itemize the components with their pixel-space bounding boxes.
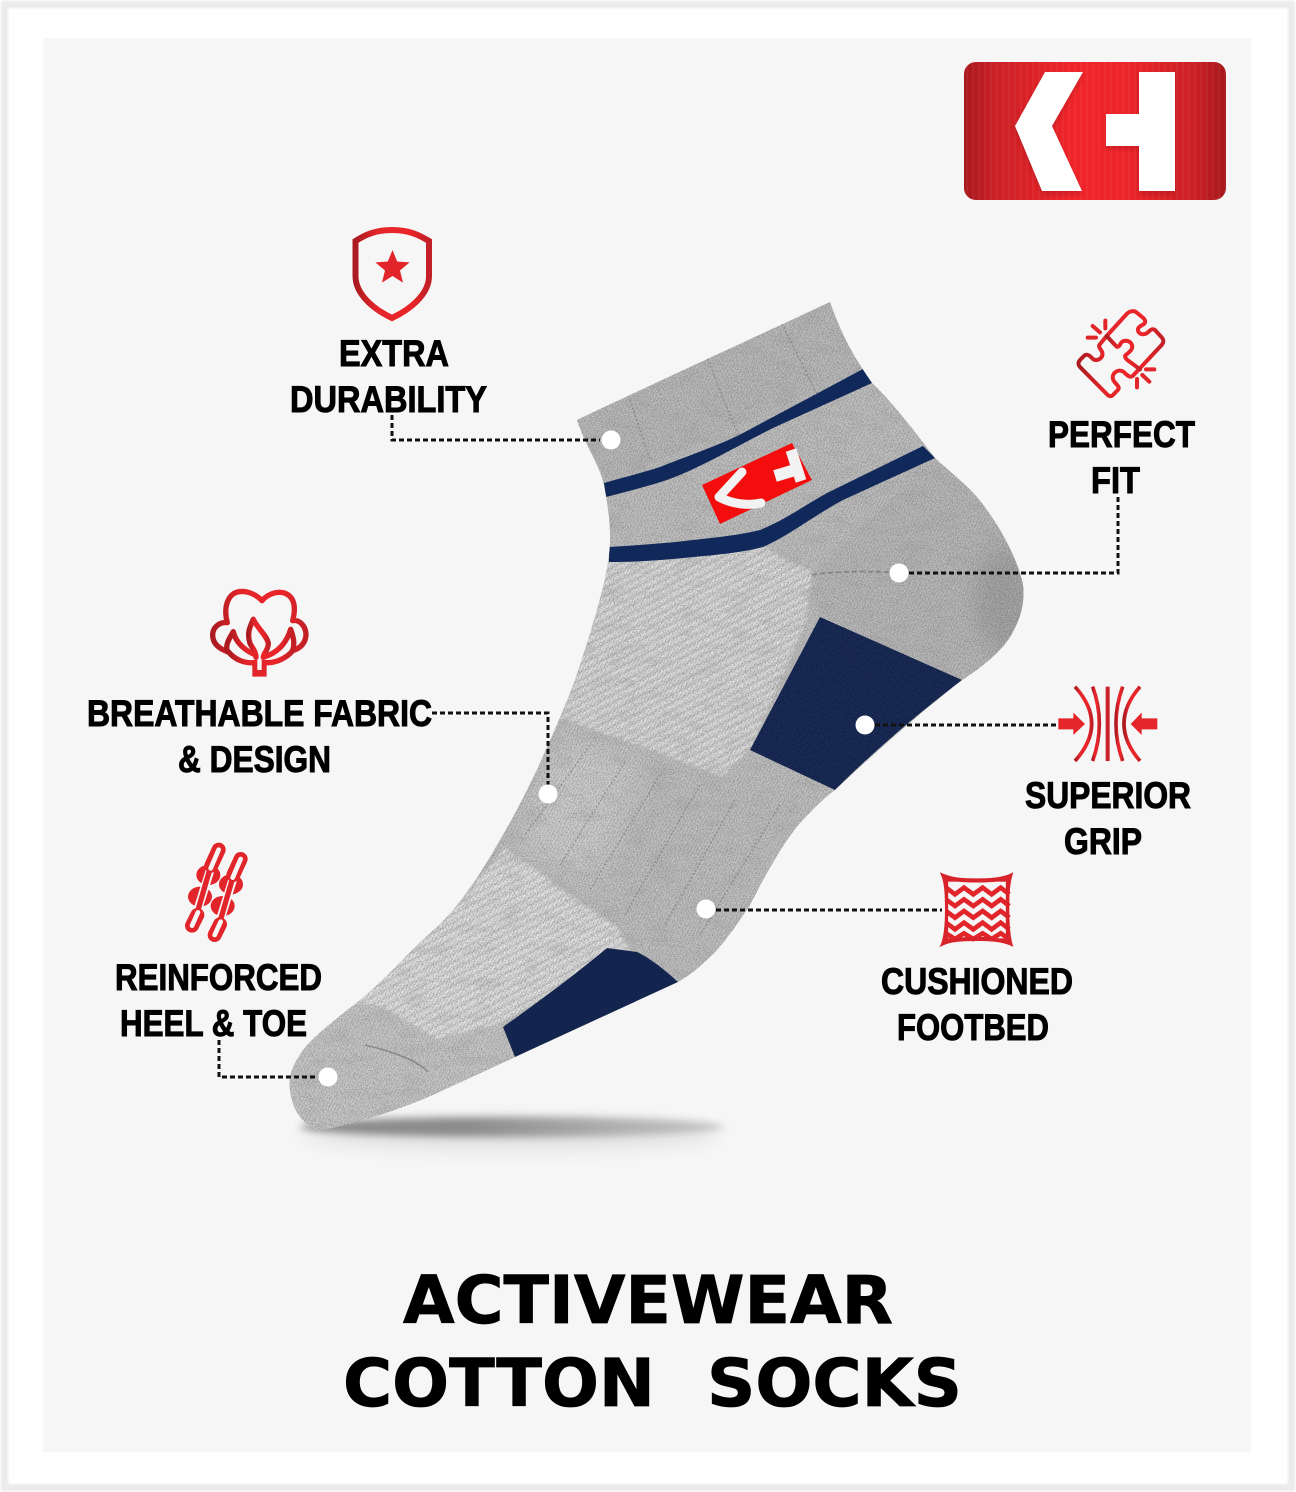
callout: superior grip xyxy=(856,687,1191,862)
arch ribbed panel xyxy=(495,718,828,954)
callout: perfect fit: PERFECT xyxy=(1048,414,1195,455)
icon: zigzag cushion xyxy=(940,872,1013,947)
navy stripe upper xyxy=(604,369,872,497)
sock illustration xyxy=(270,290,1040,1150)
navy toe block xyxy=(503,948,678,1057)
icon: chain links xyxy=(188,850,243,935)
forefoot mesh panel xyxy=(352,848,630,1040)
callout: perfect fit: FIT xyxy=(1091,460,1140,501)
title: ACTIVEWEAR xyxy=(403,1262,893,1339)
callout: perfect fit xyxy=(890,311,1195,582)
callout: cushioned footbed: CUSHIONED xyxy=(881,961,1073,1002)
icon: cotton boll xyxy=(213,591,306,677)
callout: extra durability xyxy=(290,230,620,450)
callout: breathable fabric: BREATHABLE FABRIC xyxy=(87,693,432,734)
callout: extra durability: EXTRA xyxy=(339,333,449,374)
callout: superior grip: SUPERIOR xyxy=(1025,775,1191,816)
title xyxy=(343,1262,962,1422)
callout: cushioned footbed: FOOTBED xyxy=(897,1007,1049,1048)
icon: puzzle pieces xyxy=(1078,311,1163,396)
title: COTTON xyxy=(343,1345,655,1422)
callout: superior grip: GRIP xyxy=(1064,821,1142,862)
title: SOCKS xyxy=(707,1345,962,1422)
callout: breathable fabric: & DESIGN xyxy=(178,739,331,780)
sock shadow xyxy=(300,1117,724,1151)
navy heel block xyxy=(750,617,962,790)
callout: cushioned footbed xyxy=(696,872,1073,1048)
rib lines xyxy=(525,320,820,935)
brand logo xyxy=(964,62,1226,200)
toe seam xyxy=(365,1045,428,1072)
callout: reinforced heel and toe xyxy=(115,850,338,1086)
woven logo patch xyxy=(702,443,812,524)
heel seam xyxy=(812,572,890,575)
toe cap xyxy=(290,1006,514,1130)
callout: reinforced heel and toe: HEEL & TOE xyxy=(120,1003,307,1044)
icon: compression arrows xyxy=(1058,687,1157,761)
callout: breathable fabric xyxy=(87,591,558,804)
icon: shield with star xyxy=(356,230,429,318)
cuff shading xyxy=(577,302,863,485)
upper mesh panel xyxy=(560,548,812,776)
callout: extra durability: DURABILITY xyxy=(290,379,487,420)
navy stripe lower xyxy=(609,446,935,562)
callout: reinforced heel and toe: REINFORCED xyxy=(115,957,322,998)
